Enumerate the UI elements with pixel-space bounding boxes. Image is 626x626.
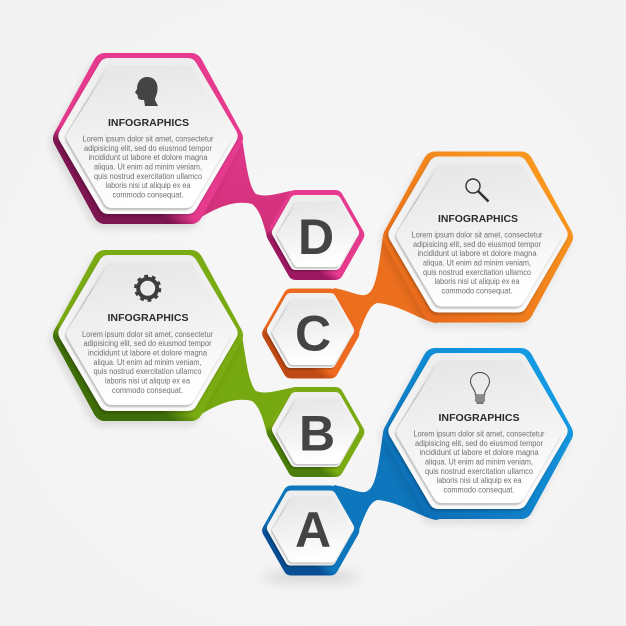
panel: B green bbox=[62, 262, 356, 469]
text block: commodo consequat. bbox=[112, 190, 184, 200]
text block: quis nostrud exercitation ullamco bbox=[94, 172, 202, 181]
text block: laboris nisi ut aliquip ex ea bbox=[105, 376, 190, 386]
connector: green bbox=[150, 309, 300, 437]
heading: INFOGRAPHICS bbox=[108, 117, 189, 129]
heading: INFOGRAPHICS bbox=[438, 412, 520, 424]
text block: commodo consequat. bbox=[442, 286, 512, 296]
text block: Lorem ipsum dolor sit amet, consectetur bbox=[412, 230, 543, 240]
text block: commodo consequat. bbox=[444, 486, 514, 494]
text block bbox=[414, 430, 545, 494]
text block: commodo consequat. bbox=[112, 386, 183, 395]
heading: INFOGRAPHICS bbox=[438, 213, 518, 225]
letter D: D bbox=[298, 209, 334, 265]
text block: laboris nisi ut aliquip ex ea bbox=[436, 476, 522, 485]
large hexagon: pink bbox=[62, 65, 231, 217]
text block: incididunt ut labore et dolore magna bbox=[88, 348, 208, 358]
text block bbox=[82, 330, 213, 395]
text block: incididunt ut labore et dolore magna bbox=[418, 249, 537, 258]
connector: blue bbox=[320, 397, 440, 537]
text block: adipisicing elit, sed do eiusmod tempor bbox=[413, 240, 541, 249]
text block: aliqua. Ut enim ad minim veniam, bbox=[423, 258, 531, 268]
text block: adipisicing elit, sed do eiusmod tempor bbox=[84, 144, 212, 153]
text block: aliqua. Ut enim ad minim veniam, bbox=[425, 458, 533, 466]
text block: Lorem ipsum dolor sit amet, consectetur bbox=[82, 330, 213, 339]
letter C: C bbox=[295, 306, 331, 362]
icon: head silhouette bbox=[135, 77, 158, 106]
small hexagon C bbox=[270, 296, 351, 370]
text block bbox=[412, 230, 543, 296]
text block: quis nostrud exercitation ullamco bbox=[94, 367, 202, 376]
icon: gear bbox=[136, 276, 160, 300]
panel: C orange bbox=[270, 164, 561, 370]
text block: aliqua. Ut enim ad minim veniam, bbox=[94, 358, 202, 367]
heading: INFOGRAPHICS bbox=[108, 312, 188, 324]
text block: incididunt ut labore et dolore magna bbox=[88, 153, 208, 162]
panel: D pink bbox=[62, 65, 356, 272]
text block: adipisicing elit, sed do eiusmod tempor bbox=[84, 339, 212, 348]
text block: aliqua. Ut enim ad minim veniam, bbox=[94, 162, 202, 172]
connector: orange bbox=[320, 200, 440, 340]
text block: adipisicing elit, sed do eiusmod tempor bbox=[415, 439, 543, 448]
small hexagon B bbox=[275, 395, 356, 469]
small hexagon A bbox=[270, 494, 351, 568]
small hexagon D bbox=[275, 198, 356, 272]
text block bbox=[82, 134, 214, 200]
icon: light bulb bbox=[470, 372, 490, 404]
text block: Lorem ipsum dolor sit amet, consectetur bbox=[82, 134, 214, 144]
text block: quis nostrud exercitation ullamco bbox=[425, 467, 533, 476]
letter B: B bbox=[299, 406, 335, 462]
large hexagon: green bbox=[62, 262, 231, 414]
text block: Lorem ipsum dolor sit amet, consectetur bbox=[414, 430, 545, 438]
text block: laboris nisi ut aliquip ex ea bbox=[106, 181, 191, 190]
panel: A blue bbox=[270, 360, 561, 568]
text block: quis nostrud exercitation ullamco bbox=[423, 268, 531, 277]
connector: pink bbox=[150, 112, 300, 240]
large hexagon: orange bbox=[392, 164, 561, 316]
ground shadow under A bbox=[261, 573, 361, 581]
letter A: A bbox=[295, 502, 331, 558]
text block: incididunt ut labore et dolore magna bbox=[420, 448, 539, 457]
text block: laboris nisi ut aliquip ex ea bbox=[434, 277, 520, 286]
large hexagon: blue bbox=[392, 360, 561, 512]
icon: magnifier bbox=[466, 179, 488, 202]
